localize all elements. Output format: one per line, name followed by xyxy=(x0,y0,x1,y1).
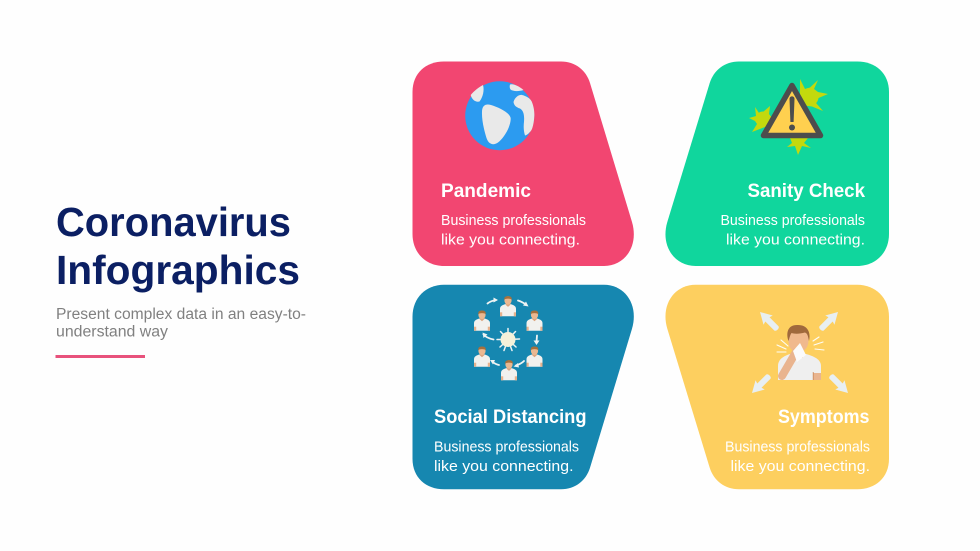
text block: Sanity Check xyxy=(720,212,865,248)
icon: globe xyxy=(465,81,534,150)
text block: Symptoms xyxy=(725,438,870,475)
text block: Pandemic: like you connecting. xyxy=(441,232,580,248)
text block: Symptoms: Business professionals xyxy=(725,438,870,456)
subtitle: understand way xyxy=(56,324,168,340)
text block: Symptoms: like you connecting. xyxy=(730,458,870,475)
heading: Social Distancing: Social Distancing xyxy=(434,407,586,428)
card shape: pink xyxy=(412,62,634,266)
panel: Social Distancing xyxy=(412,285,634,489)
text block: Sanity Check: Business professionals xyxy=(720,212,865,229)
title: Infographics xyxy=(56,247,300,293)
panel: Symptoms xyxy=(665,285,889,489)
text block: Social Distancing xyxy=(434,438,579,475)
title xyxy=(56,199,300,293)
text block: Pandemic xyxy=(441,212,586,248)
icon: person sneezing with arrows xyxy=(747,307,853,398)
subtitle xyxy=(56,306,306,340)
text block: Social Distancing: like you connecting. xyxy=(434,458,574,475)
text block: Social Distancing: Business professionals xyxy=(434,438,579,456)
card shape: blue xyxy=(412,285,634,489)
icon: people circle around virus xyxy=(474,296,542,380)
subtitle: Present complex data in an easy-to- xyxy=(56,306,306,323)
card shape: green xyxy=(665,62,889,266)
heading: Pandemic: Pandemic xyxy=(441,181,531,202)
panel: Pandemic xyxy=(412,62,634,266)
panel: Sanity Check xyxy=(665,62,889,266)
title: Coronavirus xyxy=(56,199,291,245)
text block: Sanity Check: like you connecting. xyxy=(726,232,865,248)
heading: Symptoms: Symptoms xyxy=(778,407,870,428)
text block: Pandemic: Business professionals xyxy=(441,212,586,229)
icon: warning triangle xyxy=(749,79,828,155)
card shape: yellow xyxy=(665,285,889,489)
heading: Sanity Check: Sanity Check xyxy=(748,181,865,202)
accent line xyxy=(56,355,145,358)
